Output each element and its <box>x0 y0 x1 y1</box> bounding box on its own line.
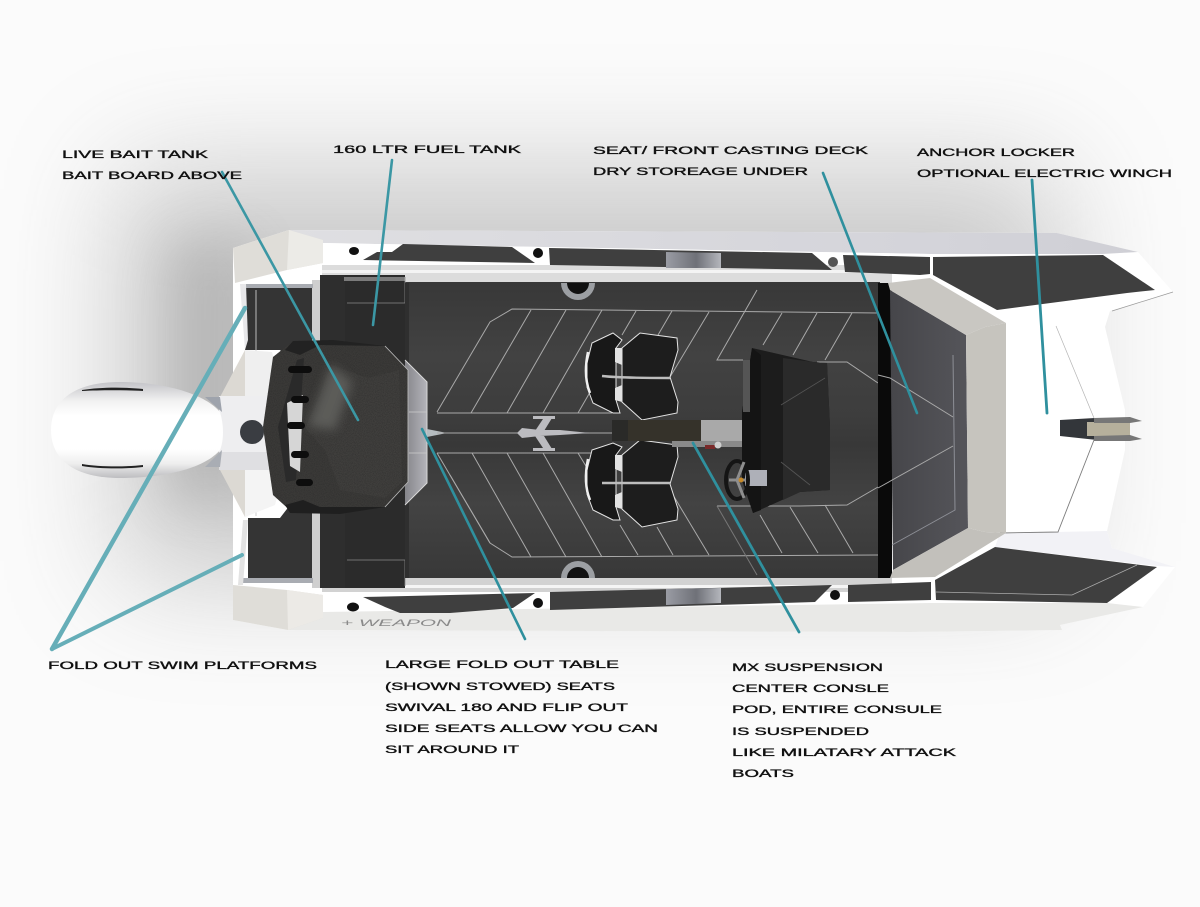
fold out table <box>405 360 447 505</box>
leader: swim platform lower <box>52 555 242 649</box>
leader: anchor locker <box>1032 180 1047 413</box>
label: live bait tank <box>62 149 242 182</box>
label: suspension <box>732 662 957 780</box>
stern corner blocks <box>233 230 323 630</box>
leader: live bait tank <box>222 172 358 420</box>
label: table: LARGE FOLD OUT TABLE <box>385 659 619 671</box>
label: suspension: POD, ENTIRE CONSULE <box>732 704 942 716</box>
label: table: (SHOWN STOWED) SEATS <box>385 681 615 693</box>
main deck <box>318 282 880 578</box>
label: suspension: CENTER CONSLE <box>732 683 889 695</box>
leader: suspension <box>693 443 799 632</box>
text: brand mark: + WEAPON <box>341 618 452 628</box>
leader: swim platform upper <box>52 308 245 649</box>
swim platform wells <box>238 284 313 585</box>
label: table <box>385 659 658 756</box>
side non-slip panels <box>363 244 1157 613</box>
label: suspension: BOATS <box>732 768 794 780</box>
suspension beam <box>612 420 742 449</box>
label: casting deck <box>593 145 869 178</box>
label: table: SIT AROUND IT <box>385 744 519 756</box>
outer hull <box>233 230 1175 632</box>
bow panel trim <box>936 565 1137 595</box>
leader: fuel tank <box>373 160 392 325</box>
label: table: SIDE SEATS ALLOW YOU CAN <box>385 723 658 735</box>
deck line pattern <box>437 290 878 575</box>
outboard engine <box>51 382 223 478</box>
callout lines <box>52 160 1047 649</box>
label: fuel tank: 160 LTR FUEL TANK <box>333 144 522 156</box>
seat pair: upper <box>586 333 678 420</box>
engine mount <box>219 350 285 517</box>
front casting deck <box>878 278 1006 578</box>
leader: table <box>422 429 525 639</box>
deck drain holes <box>561 283 595 578</box>
label: anchor locker: ANCHOR LOCKER <box>917 147 1075 159</box>
live bait tank <box>263 340 408 514</box>
label: suspension: IS SUSPENDED <box>732 726 869 738</box>
label: table: SWIVAL 180 AND FLIP OUT <box>385 702 628 714</box>
side deck strips <box>322 265 892 592</box>
engine steering ball <box>240 420 264 444</box>
label: live bait tank: LIVE BAIT TANK <box>62 149 209 161</box>
label: anchor locker <box>917 147 1172 180</box>
label: casting deck: SEAT/ FRONT CASTING DECK <box>593 145 869 157</box>
label: suspension: MX SUSPENSION <box>732 662 883 674</box>
callout labels <box>48 144 1172 780</box>
seat pair: lower <box>586 440 678 527</box>
console <box>742 348 830 513</box>
leader: casting deck <box>823 173 917 413</box>
steering wheel <box>726 461 767 499</box>
rear dark section <box>312 275 409 588</box>
boat top view <box>51 230 1175 632</box>
cleats and vents <box>347 247 840 612</box>
label: suspension: LIKE MILATARY ATTACK <box>732 747 957 759</box>
label: live bait tank: BAIT BOARD ABOVE <box>62 170 242 182</box>
jet logo <box>517 416 590 451</box>
label: anchor locker: OPTIONAL ELECTRIC WINCH <box>917 168 1172 180</box>
label: swim platforms: FOLD OUT SWIM PLATFORMS <box>48 660 317 672</box>
label: casting deck: DRY STOREAGE UNDER <box>593 166 808 178</box>
bow anchor locker <box>1060 417 1142 441</box>
